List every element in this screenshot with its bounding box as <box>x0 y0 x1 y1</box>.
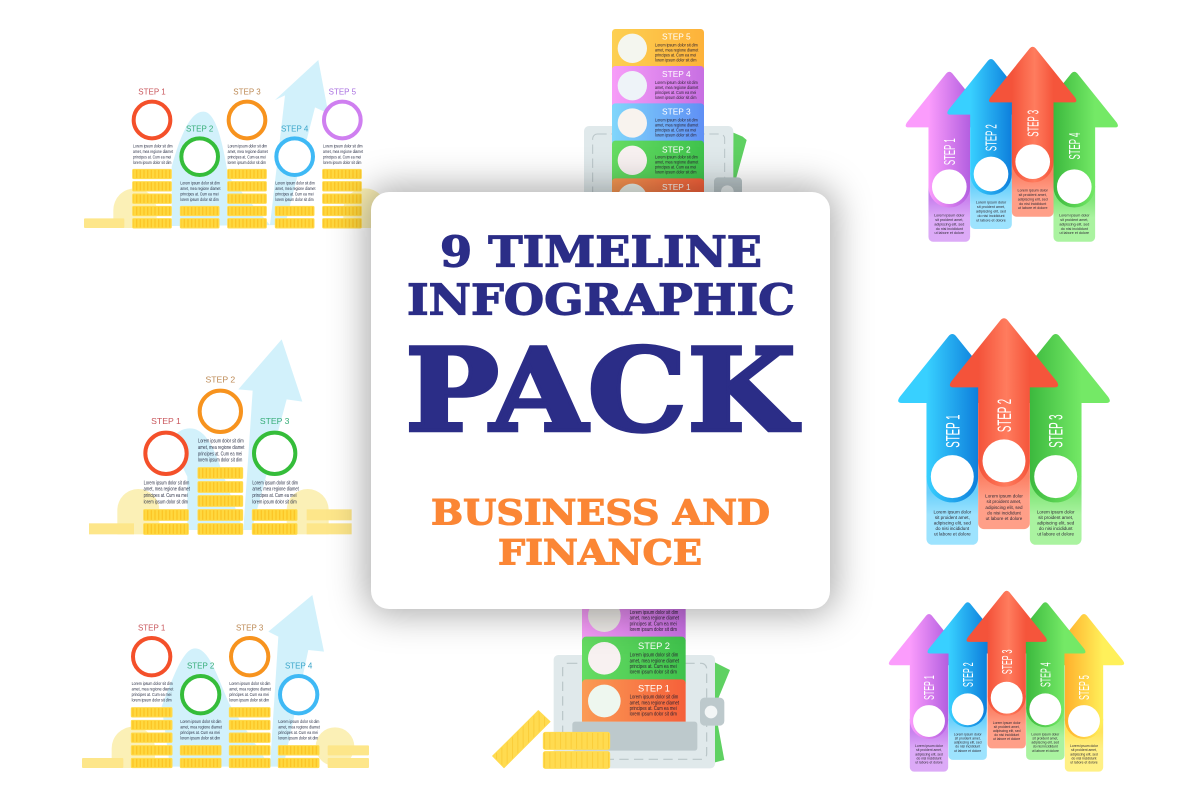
step labels: STEP 3 <box>260 416 290 426</box>
step 4 row: amet, mea regione diamet <box>655 85 699 90</box>
step labels: STEP 2 <box>186 125 214 134</box>
step 1 row <box>612 178 704 213</box>
arrow: step 3: Lorem ipsum dolor <box>993 721 1021 725</box>
arrow: step 1: Lorem ipsum dolor <box>934 213 965 217</box>
arrow: step 2: STEP 2 <box>962 662 977 687</box>
arrow: step 2: adipiscing elit, sed <box>976 209 1006 214</box>
step labels: STEP 2 <box>205 374 235 384</box>
arrow: step 1: sit proident amet, <box>935 218 963 222</box>
chart: five step coin timeline <box>84 60 387 228</box>
arrow: step 5: Lorem ipsum dolor <box>1070 744 1099 748</box>
step descriptions: lorem ipsum dolor sit dim <box>323 160 361 165</box>
step 2 row: amet, mea regione diamet <box>655 159 699 165</box>
growth arrow <box>170 339 302 530</box>
arrow: step 1: Lorem ipsum dolor <box>933 509 972 515</box>
step 5 row: lorem ipsum dolor sit dim <box>655 57 697 63</box>
step labels: STEP 4 <box>281 125 309 134</box>
arrow: step 3: do nisi incididunt <box>1039 526 1073 532</box>
step descriptions: Lorem ipsum dolor sit dim <box>132 681 173 686</box>
step 3 row: Lorem ipsum dolor sit dim <box>630 610 678 616</box>
step rings <box>133 638 317 713</box>
arrow: step 2: ut labore et dolore <box>986 516 1023 522</box>
coin stacks <box>131 708 319 768</box>
step descriptions: principes at. Cum ea mei <box>198 451 242 456</box>
arrow: step 1: STEP 1 <box>923 675 938 700</box>
step descriptions: lorem ipsum dolor sit dim <box>144 499 188 504</box>
step 3 row: principes at. Cum ea mei <box>655 127 696 132</box>
icon: wallet body <box>554 655 724 768</box>
arrow: step 3: do nisi incididunt <box>1019 202 1047 206</box>
step descriptions: lorem ipsum dolor sit dim <box>252 499 297 504</box>
step descriptions: amet, mea regione diamet <box>132 686 174 692</box>
growth arrow <box>162 595 324 767</box>
step labels: STEP 3 <box>233 88 261 97</box>
step labels: STEP 1 <box>151 416 181 426</box>
step descriptions <box>133 143 364 202</box>
step descriptions: lorem ipsum dolor sit dim <box>180 735 221 741</box>
step descriptions: amet, mea regione diamet <box>180 185 221 191</box>
step labels: STEP 1 <box>138 88 166 97</box>
step 2 row: STEP 2 <box>662 144 691 154</box>
step labels <box>138 88 357 134</box>
icon: banknotes <box>713 662 730 762</box>
arrow: step 1: ut labore et dolore <box>934 531 971 538</box>
step 5 row: Lorem ipsum dolor sit dim <box>655 42 698 48</box>
step descriptions: Lorem ipsum dolor sit dim <box>278 719 320 724</box>
step 3 row: principes at. Cum ea mei <box>630 621 677 628</box>
step 5 row: principes at. Cum ea mei <box>655 52 696 58</box>
arrow: step 5: sit proident amet, <box>1071 748 1097 752</box>
arrow: step 1: do nisi incididunt <box>935 526 970 532</box>
step descriptions: principes at. Cum ea mei <box>180 730 220 735</box>
step 2 row: lorem ipsum dolor sit dim <box>630 669 677 676</box>
step descriptions: lorem ipsum dolor sit dim <box>228 160 266 165</box>
arrow: step 1: Lorem ipsum dolor <box>915 744 944 748</box>
step descriptions: principes at. Cum ea mei <box>133 154 171 160</box>
title: 9 timeline: 9 TIMELINE <box>440 228 762 276</box>
step descriptions: amet, mea regione diamet <box>252 486 299 492</box>
step descriptions: Lorem ipsum dolor sit dim <box>228 143 267 149</box>
step 5 row: STEP 5 <box>662 32 691 42</box>
pale coin backdrop <box>89 489 352 534</box>
step 4 row: STEP 4 <box>662 69 691 79</box>
coin stacks <box>133 169 361 228</box>
arrow: step 1: adipiscing elit, sed <box>934 520 971 527</box>
step descriptions: lorem ipsum dolor sit dim <box>132 697 172 703</box>
step descriptions: Lorem ipsum dolor sit dim <box>229 681 271 686</box>
arrow: step 4: sit proident amet, <box>1060 218 1088 222</box>
step 3 row: STEP 3 <box>662 106 691 116</box>
arrow: step 3: STEP 3 <box>1046 414 1068 448</box>
arrow: step 2: STEP 2 <box>995 399 1016 432</box>
step descriptions: amet, mea regione diamet <box>144 486 191 492</box>
step 1 row: STEP 1 <box>662 182 691 192</box>
step descriptions: Lorem ipsum dolor sit dim <box>180 719 222 724</box>
step descriptions: principes at. Cum ea mei <box>323 154 361 160</box>
step descriptions: Lorem ipsum dolor sit dim <box>275 180 315 185</box>
step descriptions: Lorem ipsum dolor sit dim <box>180 180 220 185</box>
arrow: step 4: adipiscing elit, sed <box>1059 222 1089 226</box>
wallet infographic: top <box>584 29 747 227</box>
step 4 row: principes at. Cum ea mei <box>655 90 696 95</box>
step 2 row: Lorem ipsum dolor sit dim <box>655 154 698 160</box>
step labels: STEP 1 <box>138 624 166 633</box>
step 1 row <box>582 679 686 722</box>
arrow: step 2: STEP 2 <box>983 124 1000 151</box>
step descriptions: Lorem ipsum dolor sit dim <box>198 438 244 444</box>
arrow: step 2: sit proident amet, <box>987 499 1021 505</box>
arrow: step 1: adipiscing elit, sed <box>934 222 964 226</box>
step descriptions: lorem ipsum dolor sit dim <box>133 160 171 165</box>
step 4 row: Lorem ipsum dolor sit dim <box>655 80 698 85</box>
arrow: step 4: STEP 4 <box>1066 133 1084 159</box>
arrow: step 2: adipiscing elit, sed <box>985 505 1023 511</box>
arrow: step 4: Lorem ipsum dolor <box>1031 732 1060 736</box>
arrow: step 3 <box>1002 334 1110 545</box>
arrow: step 5: adipiscing elit, sed <box>1070 752 1098 756</box>
arrow: step 2: do nisi incididunt <box>955 745 980 749</box>
step 1 row: STEP 1 <box>638 684 670 694</box>
step 2 row: amet, mea regione diamet <box>630 658 680 665</box>
arrow: step 3: Lorem ipsum dolor <box>1037 509 1075 515</box>
step descriptions: amet, mea regione diamet <box>133 149 174 154</box>
arrow: step 2: adipiscing elit, sed <box>954 740 981 745</box>
arrow: step 4: adipiscing elit, sed <box>1032 740 1059 745</box>
arrow: step 1: do nisi incididunt <box>917 756 941 760</box>
arrow: step 4: do nisi incididunt <box>1061 227 1089 231</box>
arrow: step 2: sit proident amet, <box>955 736 981 741</box>
step descriptions: amet, mea regione diamet <box>198 445 245 450</box>
arrow: step 2 <box>950 318 1058 529</box>
step descriptions: amet, mea regione diamet <box>275 185 316 191</box>
arrow: step 3: ut labore et dolore <box>1018 206 1047 210</box>
step 1 row: Lorem ipsum dolor sit dim <box>630 694 678 701</box>
chart: four step coin timeline <box>82 595 369 768</box>
arrow: step 3: adipiscing elit, sed <box>1018 197 1048 201</box>
subtitle: business and: BUSINESS AND <box>431 492 770 534</box>
step 2 row: principes at. Cum ea mei <box>655 164 696 170</box>
arrow: step 2: ut labore et dolore <box>976 218 1006 223</box>
arrow: step 2: do nisi incididunt <box>977 214 1005 218</box>
arrow: step 2: Lorem ipsum dolor <box>985 494 1023 500</box>
step 3 row: lorem ipsum dolor sit dim <box>630 627 677 633</box>
step descriptions: principes at. Cum ea mei <box>275 191 314 196</box>
step 3 row <box>582 599 686 641</box>
arrow: step 4 <box>1005 602 1085 760</box>
chart: three step coin timeline <box>89 339 352 534</box>
step 1 row: lorem ipsum dolor sit dim <box>630 711 677 718</box>
pale coin backdrop <box>84 188 387 228</box>
step rings <box>145 391 295 474</box>
step 1 row: amet, mea regione diamet <box>630 700 680 707</box>
step 5 row: amet, mea regione diamet <box>655 47 699 53</box>
step 2 row: lorem ipsum dolor sit dim <box>655 169 697 175</box>
icon: wallet body <box>584 126 742 227</box>
arrow: step 2: Lorem ipsum dolor <box>976 201 1007 205</box>
step descriptions: principes at. Cum ea mei <box>278 730 318 735</box>
step 2 row: STEP 2 <box>638 641 670 651</box>
step 3 row: lorem ipsum dolor sit dim <box>655 132 697 137</box>
arrow: step 1: ut labore et dolore <box>935 231 964 235</box>
step 4 row <box>612 66 704 107</box>
step 5 row <box>612 29 704 70</box>
step 1 row: principes at. Cum ea mei <box>630 706 677 712</box>
step descriptions: amet, mea regione diamet <box>180 724 223 730</box>
step labels <box>151 374 290 426</box>
step labels: STEP 4 <box>285 662 313 671</box>
arrow: step 1: sit proident amet, <box>916 748 942 752</box>
arrow group: four steps <box>906 47 1118 242</box>
arrow: step 1: sit proident amet, <box>935 515 970 521</box>
arrow: step 2: Lorem ipsum dolor <box>954 732 982 736</box>
arrow: step 2: ut labore et dolore <box>954 749 981 753</box>
step 3 row: Lorem ipsum dolor sit dim <box>655 117 698 122</box>
arrow: step 3: sit proident amet, <box>1038 515 1073 521</box>
step descriptions: amet, mea regione diamet <box>278 724 321 730</box>
title: infographic: INFOGRAPHIC <box>407 276 795 324</box>
step labels: STEP 2 <box>187 662 215 671</box>
step 3 row: amet, mea regione diamet <box>655 122 699 127</box>
arrow: step 1: ut labore et dolore <box>915 760 943 765</box>
step descriptions: principes at. Cum ea mei <box>228 154 266 160</box>
arrow: step 1 <box>898 334 1006 545</box>
arrow: step 2: do nisi incididunt <box>987 510 1021 516</box>
title: pack: PACK <box>405 324 800 458</box>
arrow: step 3: ut labore et dolore <box>993 737 1020 741</box>
arrow: step 2 <box>928 602 1008 760</box>
arrow: step 2: sit proident amet, <box>977 205 1005 209</box>
arrow group: three steps <box>898 318 1110 545</box>
icon: coins <box>493 711 610 768</box>
panel: central title card <box>371 192 830 609</box>
arrow: step 3: sit proident amet, <box>1019 193 1047 197</box>
arrow: step 3 <box>989 47 1076 217</box>
step 2 row: Lorem ipsum dolor sit dim <box>630 652 678 659</box>
step descriptions: amet, mea regione diamet <box>323 149 364 154</box>
step descriptions: principes at. Cum ea mei <box>132 692 171 697</box>
step labels: STEP 5 <box>329 88 357 97</box>
step descriptions <box>144 438 299 504</box>
step labels: STEP 3 <box>236 624 264 633</box>
arrow: step 4: sit proident amet, <box>1032 736 1058 741</box>
step descriptions: lorem ipsum dolor sit dim <box>180 196 219 202</box>
arrow: step 1 <box>889 614 969 772</box>
step descriptions: Lorem ipsum dolor sit dim <box>252 480 298 485</box>
step descriptions: principes at. Cum ea mei <box>180 191 219 196</box>
wallet infographic: bottom <box>493 599 730 768</box>
arrow: step 4: do nisi incididunt <box>1033 745 1058 749</box>
step descriptions: lorem ipsum dolor sit dim <box>278 735 319 741</box>
step descriptions: Lorem ipsum dolor sit dim <box>323 143 363 149</box>
arrow: step 1 <box>906 72 993 242</box>
arrow: step 3 <box>967 591 1047 748</box>
step descriptions: principes at. Cum ea mei <box>144 493 188 498</box>
pale coin backdrop <box>82 727 369 768</box>
step 4 row: lorem ipsum dolor sit dim <box>655 95 697 100</box>
arrow: step 4: ut labore et dolore <box>1060 231 1089 235</box>
coin stacks <box>144 468 297 534</box>
arrow: step 3: adipiscing elit, sed <box>993 729 1020 733</box>
step descriptions <box>132 681 321 741</box>
arrow: step 5: do nisi incididunt <box>1072 756 1096 760</box>
step descriptions: principes at. Cum ea mei <box>252 493 296 498</box>
step descriptions: principes at. Cum ea mei <box>229 692 269 697</box>
step rings <box>134 102 361 175</box>
step 2 row <box>612 141 704 182</box>
step descriptions: lorem ipsum dolor sit dim <box>198 457 243 463</box>
subtitle: finance: FINANCE <box>498 532 702 574</box>
step 3 row <box>612 103 704 145</box>
step descriptions: Lorem ipsum dolor sit dim <box>144 480 190 485</box>
arrow: step 5 <box>1044 614 1124 772</box>
growth arrow <box>172 60 328 226</box>
step descriptions: lorem ipsum dolor sit dim <box>275 196 314 202</box>
step 3 row: amet, mea regione diamet <box>630 615 680 622</box>
arrow: step 1: STEP 1 <box>943 414 964 448</box>
arrow: step 3: do nisi incididunt <box>994 733 1019 737</box>
arrow: step 5: ut labore et dolore <box>1070 760 1098 765</box>
step descriptions: amet, mea regione diamet <box>229 686 272 692</box>
arrow: step 5: STEP 5 <box>1078 675 1093 700</box>
arrow: step 3: STEP 3 <box>1024 110 1042 137</box>
step 2 row <box>582 637 686 683</box>
step descriptions: lorem ipsum dolor sit dim <box>229 697 270 703</box>
arrow: step 2 <box>947 59 1035 229</box>
arrow: step 1: do nisi incididunt <box>936 227 964 231</box>
arrow: step 3: ut labore et dolore <box>1037 531 1074 538</box>
arrow: step 4: Lorem ipsum dolor <box>1059 213 1090 217</box>
arrow: step 3: STEP 3 <box>1001 650 1016 674</box>
icon: banknotes <box>733 133 747 180</box>
arrow group: five steps <box>889 591 1124 772</box>
arrow: step 3: sit proident amet, <box>994 725 1020 729</box>
arrow: step 3: Lorem ipsum dolor <box>1018 188 1049 192</box>
arrow: step 4 <box>1031 72 1118 242</box>
arrow: step 1: adipiscing elit, sed <box>915 752 943 756</box>
arrow: step 4: STEP 4 <box>1039 662 1054 687</box>
step descriptions: amet, mea regione diamet <box>228 149 269 154</box>
step descriptions: Lorem ipsum dolor sit dim <box>133 143 173 149</box>
arrow: step 3: adipiscing elit, sed <box>1037 520 1075 527</box>
arrow: step 4: ut labore et dolore <box>1032 749 1059 753</box>
arrow: step 1: STEP 1 <box>941 138 959 165</box>
step labels <box>138 624 313 671</box>
step 2 row: principes at. Cum ea mei <box>630 664 677 670</box>
